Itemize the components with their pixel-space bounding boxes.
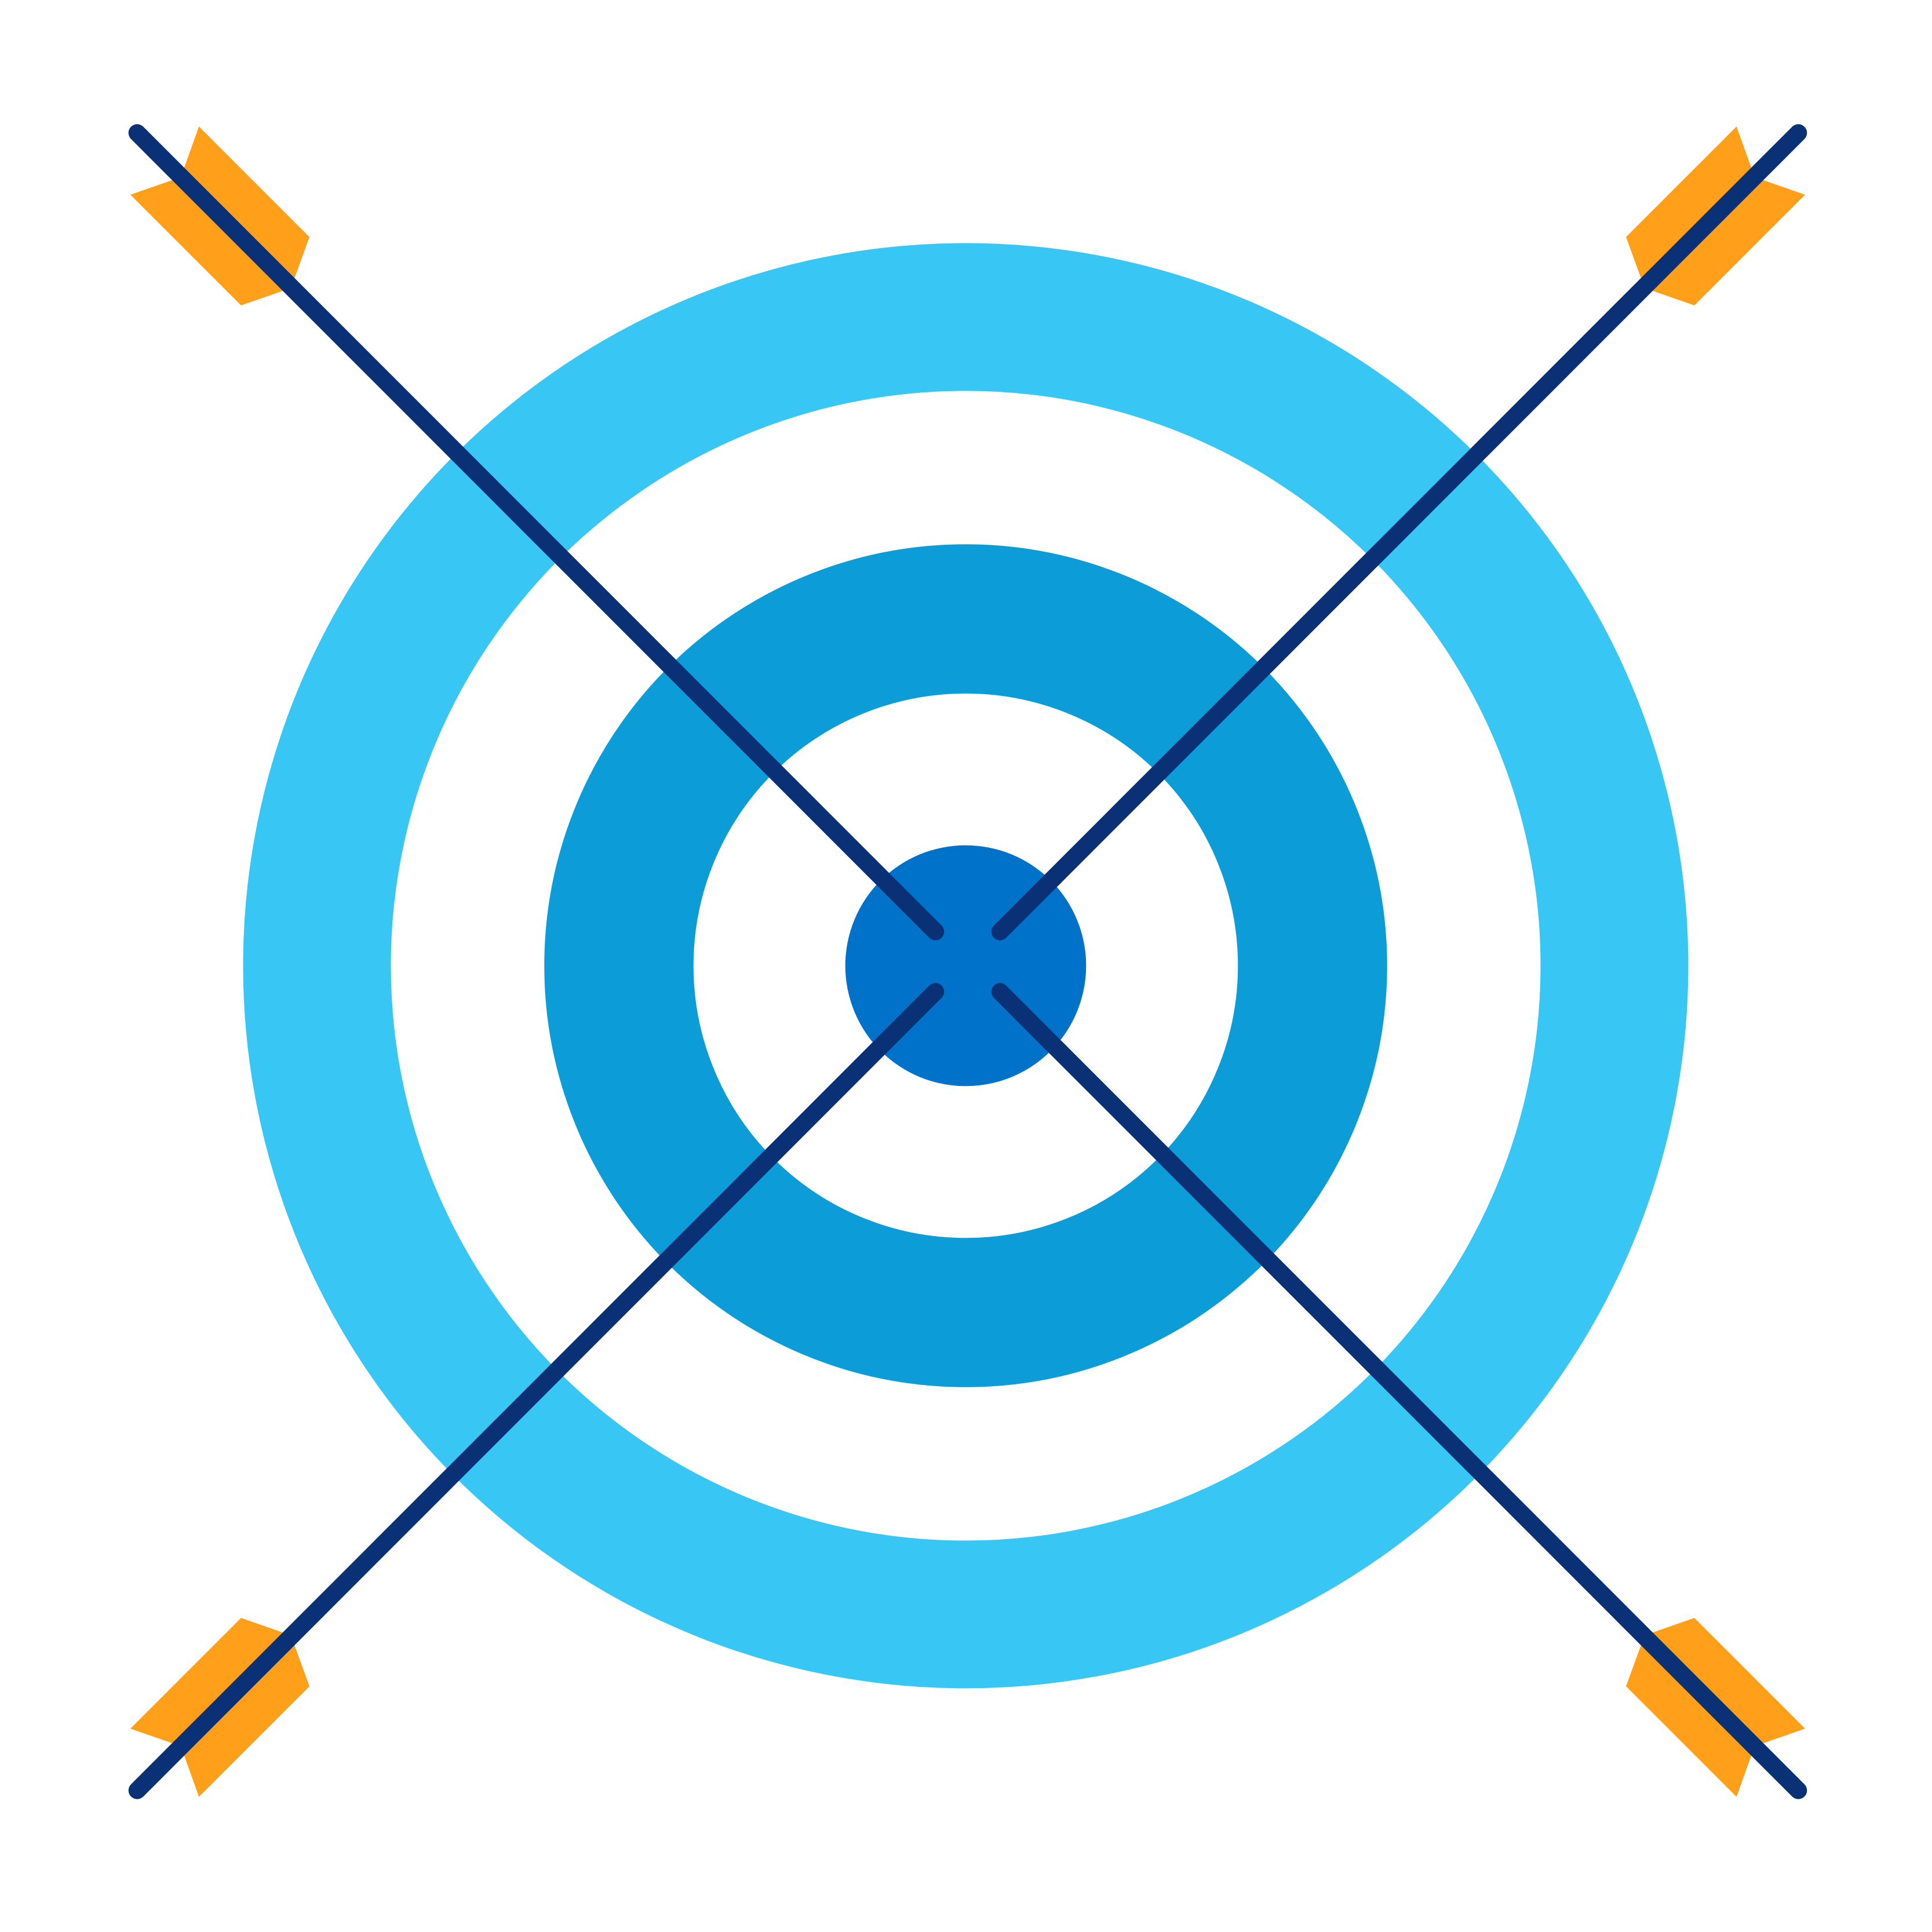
fletching: top left bbox=[130, 126, 309, 305]
fletching: bottom right bbox=[1626, 1618, 1805, 1797]
middle ring bbox=[619, 619, 1313, 1313]
arrow: bottom right bbox=[1000, 991, 1805, 1797]
arrow: bottom left bbox=[130, 991, 935, 1797]
shaft: bottom left bbox=[137, 991, 935, 1791]
shaft: bottom right bbox=[1000, 991, 1798, 1791]
outer ring bbox=[317, 317, 1614, 1614]
target: concentric rings bbox=[317, 317, 1614, 1614]
bullseye bbox=[845, 845, 1086, 1086]
shaft: top left bbox=[137, 133, 935, 932]
arrow: top right bbox=[1000, 126, 1805, 932]
arrow: top left bbox=[130, 126, 935, 932]
shaft: top right bbox=[1000, 133, 1798, 932]
fletching: top right bbox=[1626, 126, 1805, 305]
fletching: bottom left bbox=[130, 1618, 309, 1797]
